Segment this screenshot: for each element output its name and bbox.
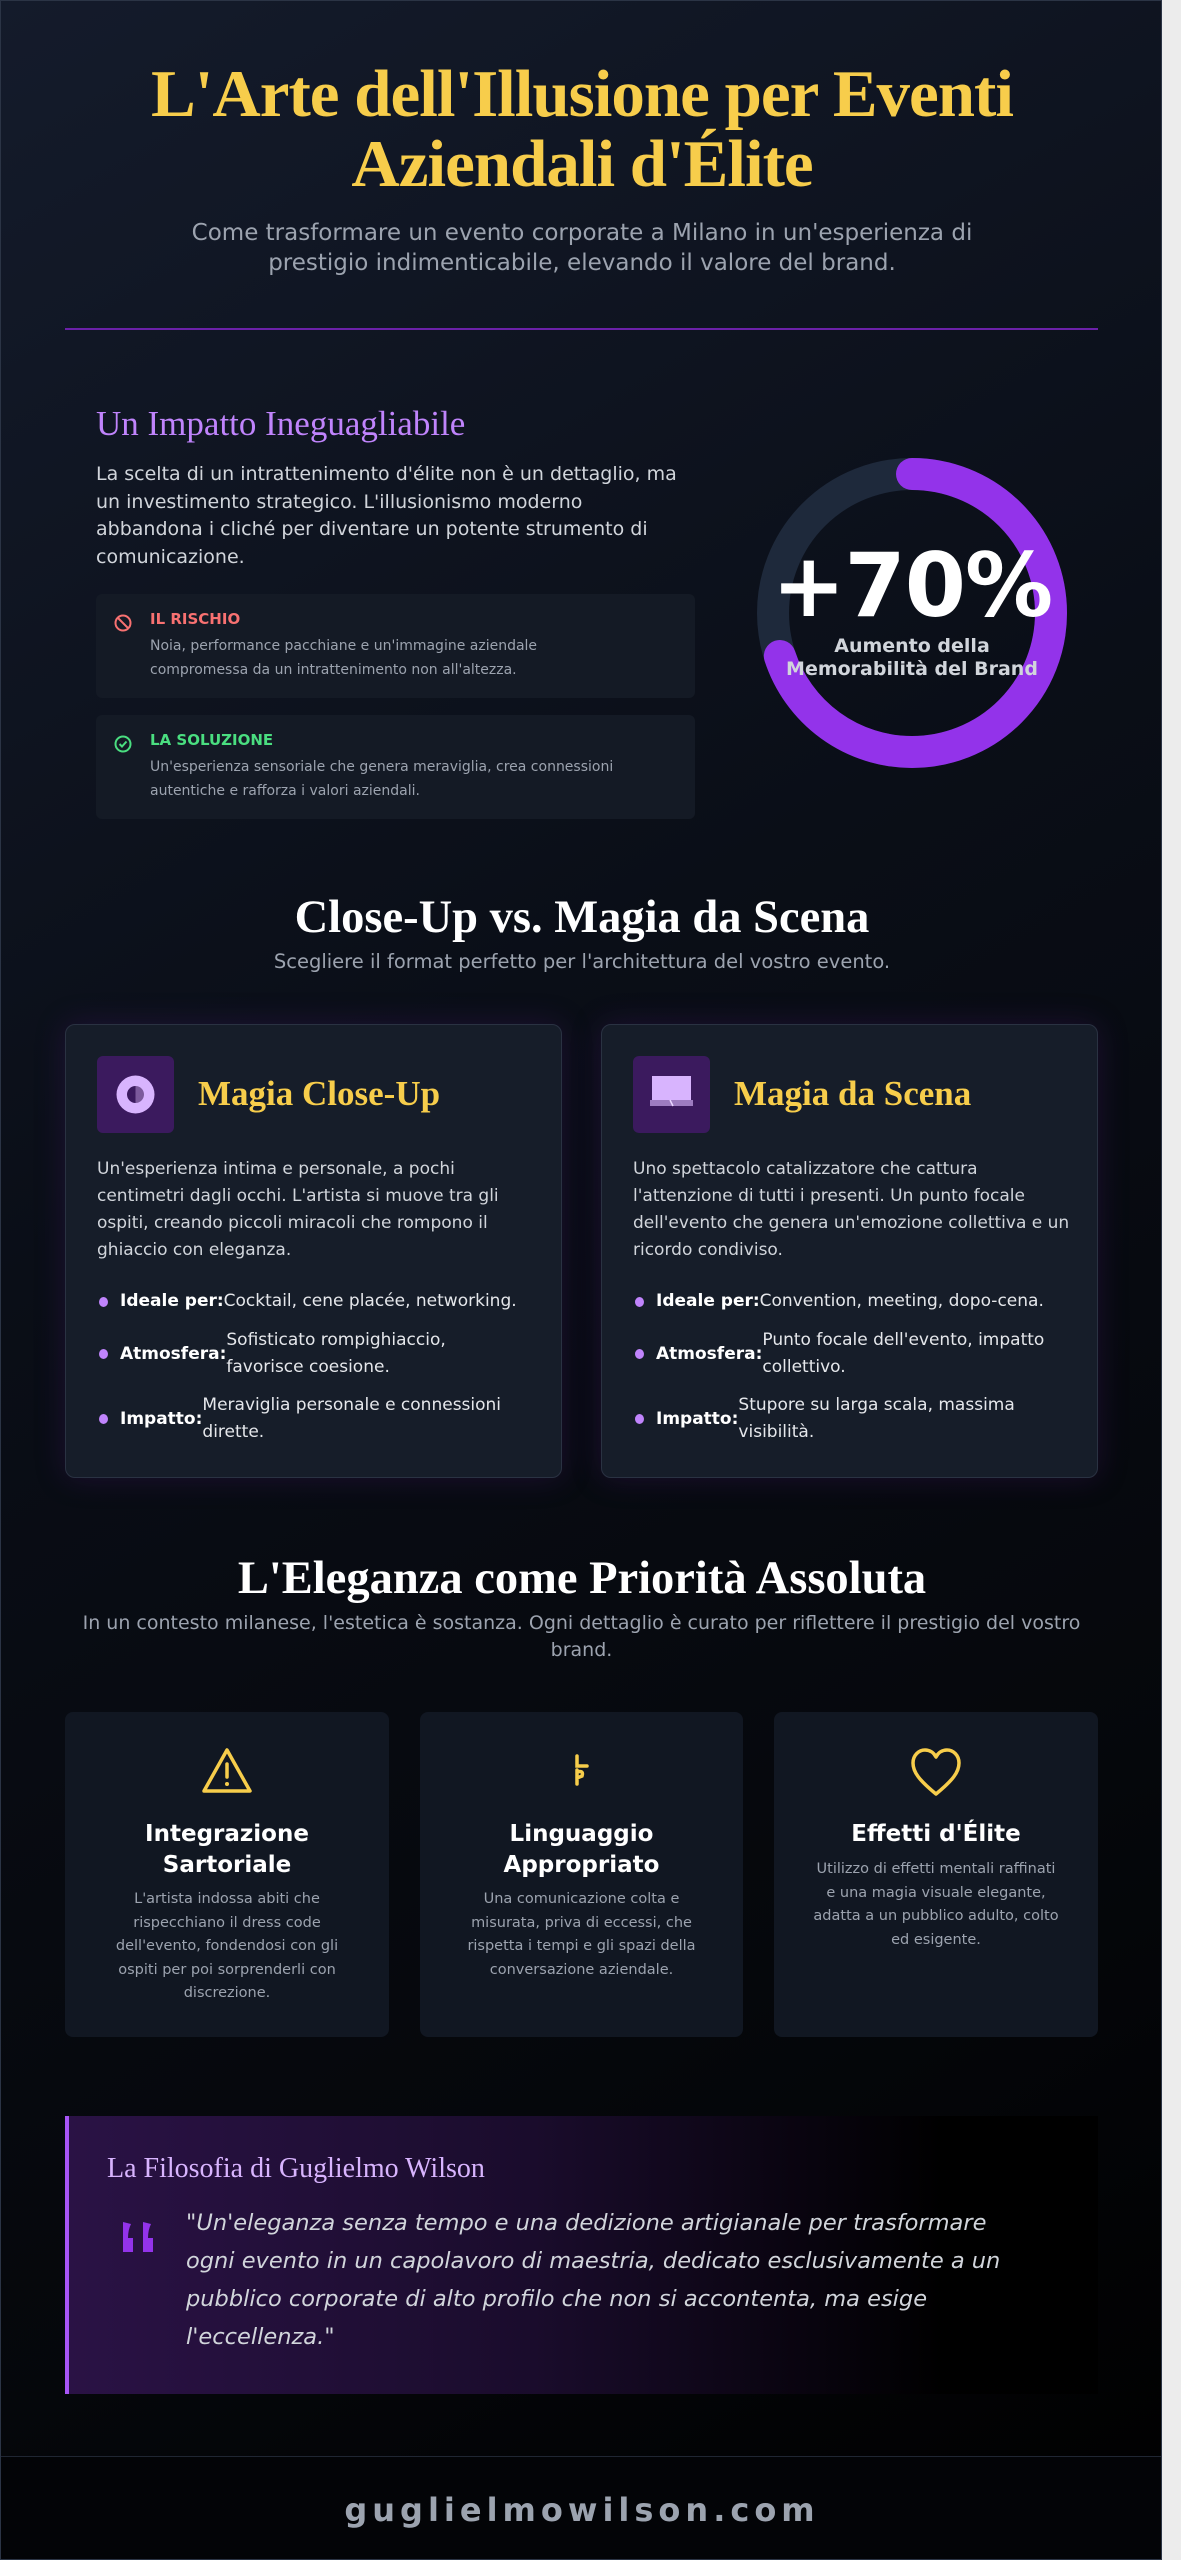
- list: scena details: [635, 1291, 1044, 1442]
- list: scena details: Stupore su larga scala, massima visibilità.: [738, 1395, 1015, 1442]
- callout: filosofia quote: La Filosofia di Guglielmo Wilson: [107, 2153, 485, 2184]
- list: scena details: Atmosfera:: [656, 1344, 762, 1364]
- panel: effetti d'elite: [774, 1712, 1098, 2037]
- list: close-up details: Ideale per:: [120, 1291, 224, 1311]
- icon: stage: [633, 1056, 710, 1133]
- panel: effetti d'elite: Effetti d'Élite: [851, 1821, 1021, 1847]
- list: close-up details: [99, 1291, 517, 1442]
- section: impatto: [96, 404, 695, 819]
- footer: guglielmowilson.com: [344, 2491, 820, 2529]
- panel: effetti d'elite: Utilizzo di effetti mentali raffinati e una magia visuale elegante, adatta a un pubblico adulto, colto ed esigente.: [813, 1861, 1059, 1948]
- subtitle: prestigio indimenticabile, elevando il valore del brand.: [268, 250, 896, 276]
- title: L'Arte dell'Illusione per Eventi: [151, 57, 1013, 131]
- panel: magia da scena: [601, 1024, 1098, 1478]
- list: close-up details: Meraviglia personale e connessioni dirette.: [202, 1395, 501, 1442]
- callout: il rischio: Noia, performance pacchiane e un'immagine aziendale compromessa da un intrattenimento non all'altezza.: [150, 638, 537, 678]
- heading: eleganza: L'Eleganza come Priorità Assoluta: [238, 1553, 926, 1604]
- list: close-up details: Cocktail, cene placée, networking.: [224, 1291, 517, 1311]
- footer: [1, 2456, 1163, 2560]
- callout: il rischio: [96, 594, 695, 698]
- callout: il rischio: IL RISCHIO: [150, 610, 240, 628]
- icon: quote marks: [123, 2222, 153, 2252]
- panel: magia da scena: Magia da Scena: [734, 1074, 971, 1113]
- text: close-up description: Un'esperienza intima e personale, a pochi centimetri dagli occhi. L'artista si muove tra gli ospiti, creando piccoli miracoli che rompono il ghiaccio con eleganza.: [97, 1159, 499, 1260]
- list: scena details: Convention, meeting, dopo-cena.: [760, 1291, 1044, 1311]
- list: close-up details: Atmosfera:: [120, 1344, 226, 1364]
- list: scena details: Impatto:: [656, 1408, 738, 1428]
- list: scena details: Punto focale dell'evento, impatto collettivo.: [762, 1330, 1044, 1377]
- callout: la soluzione: LA SOLUZIONE: [150, 731, 273, 749]
- subtitle: [192, 220, 972, 276]
- panel: linguaggio appropriato: Una comunicazione colta e misurata, priva di eccessi, che rispetta i tempi e gli spazi della conversazione aziendale.: [467, 1891, 696, 1978]
- panel: magia close-up: Magia Close-Up: [198, 1074, 440, 1113]
- text: scena description: Uno spettacolo catalizzatore che cattura l'attenzione di tutti i presenti. Un punto focale dell'evento che genera un'emozione collettiva e un ricordo condiviso.: [633, 1159, 1069, 1260]
- icon: close-up: [97, 1056, 174, 1133]
- title: [151, 57, 1013, 201]
- list: close-up details: Impatto:: [120, 1408, 202, 1428]
- panel: integrazione sartoriale: L'artista indossa abiti che rispecchiano il dress code dell'evento, fondendosi con gli ospiti per poi sorprenderli con discrezione.: [116, 1891, 338, 2001]
- panel: linguaggio appropriato: [420, 1712, 743, 2037]
- callout: filosofia quote: "Un'eleganza senza tempo e una dedizione artigianale per trasformare ogni evento in un capolavoro di maestria, dedicato esclusivamente a un pubblico corporate di alto profilo che non si accontenta, ma esige l'eccellenza.": [186, 2210, 1000, 2350]
- icon: forbidden: [114, 614, 132, 632]
- list: close-up details: Sofisticato rompighiaccio, favorisce coesione.: [226, 1330, 446, 1377]
- panel: linguaggio appropriato: Appropriato: [504, 1852, 659, 1878]
- icon: check: [114, 736, 132, 752]
- chart: donut 70%: +70%: [772, 534, 1052, 637]
- chart: donut 70%: Aumento della: [834, 635, 990, 657]
- chart: donut 70%: [757, 458, 1067, 768]
- icon: warning: [202, 1748, 252, 1793]
- heading: un impatto: Un Impatto Ineguagliabile: [96, 404, 465, 443]
- subtitle: Come trasformare un evento corporate a Milano in un'esperienza di: [192, 220, 972, 246]
- subtitle: eleganza: In un contesto milanese, l'estetica è sostanza. Ogni dettaglio è curato per riflettere il prestigio del vostro brand.: [83, 1612, 1080, 1661]
- chart: donut 70%: Memorabilità del Brand: [786, 658, 1038, 680]
- panel: integrazione sartoriale: Sartoriale: [163, 1852, 291, 1878]
- callout: filosofia quote: [65, 2116, 1098, 2394]
- callout: la soluzione: Un'esperienza sensoriale che genera meraviglia, crea connessioni autentiche e rafforza i valori aziendali.: [150, 759, 613, 799]
- panel: linguaggio appropriato: Linguaggio: [510, 1821, 653, 1847]
- callout: la soluzione: [96, 715, 695, 819]
- text: intro paragraph: La scelta di un intrattenimento d'élite non è un dettaglio, ma un investimento strategico. L'illusionismo moderno abbandona i cliché per diventare un potente strumento di comunicazione.: [96, 463, 677, 568]
- icon: speech: [575, 1754, 589, 1786]
- heading: close-up vs scena: Close-Up vs. Magia da Scena: [295, 892, 869, 943]
- list: scena details: Ideale per:: [656, 1291, 760, 1311]
- subtitle: format: Scegliere il format perfetto per l'architettura del vostro evento.: [274, 950, 890, 973]
- panel: magia close-up: [65, 1024, 562, 1478]
- title: Aziendali d'Élite: [351, 127, 813, 201]
- icon: heart: [911, 1748, 961, 1796]
- panel: integrazione sartoriale: Integrazione: [145, 1821, 309, 1847]
- panel: integrazione sartoriale: [65, 1712, 389, 2037]
